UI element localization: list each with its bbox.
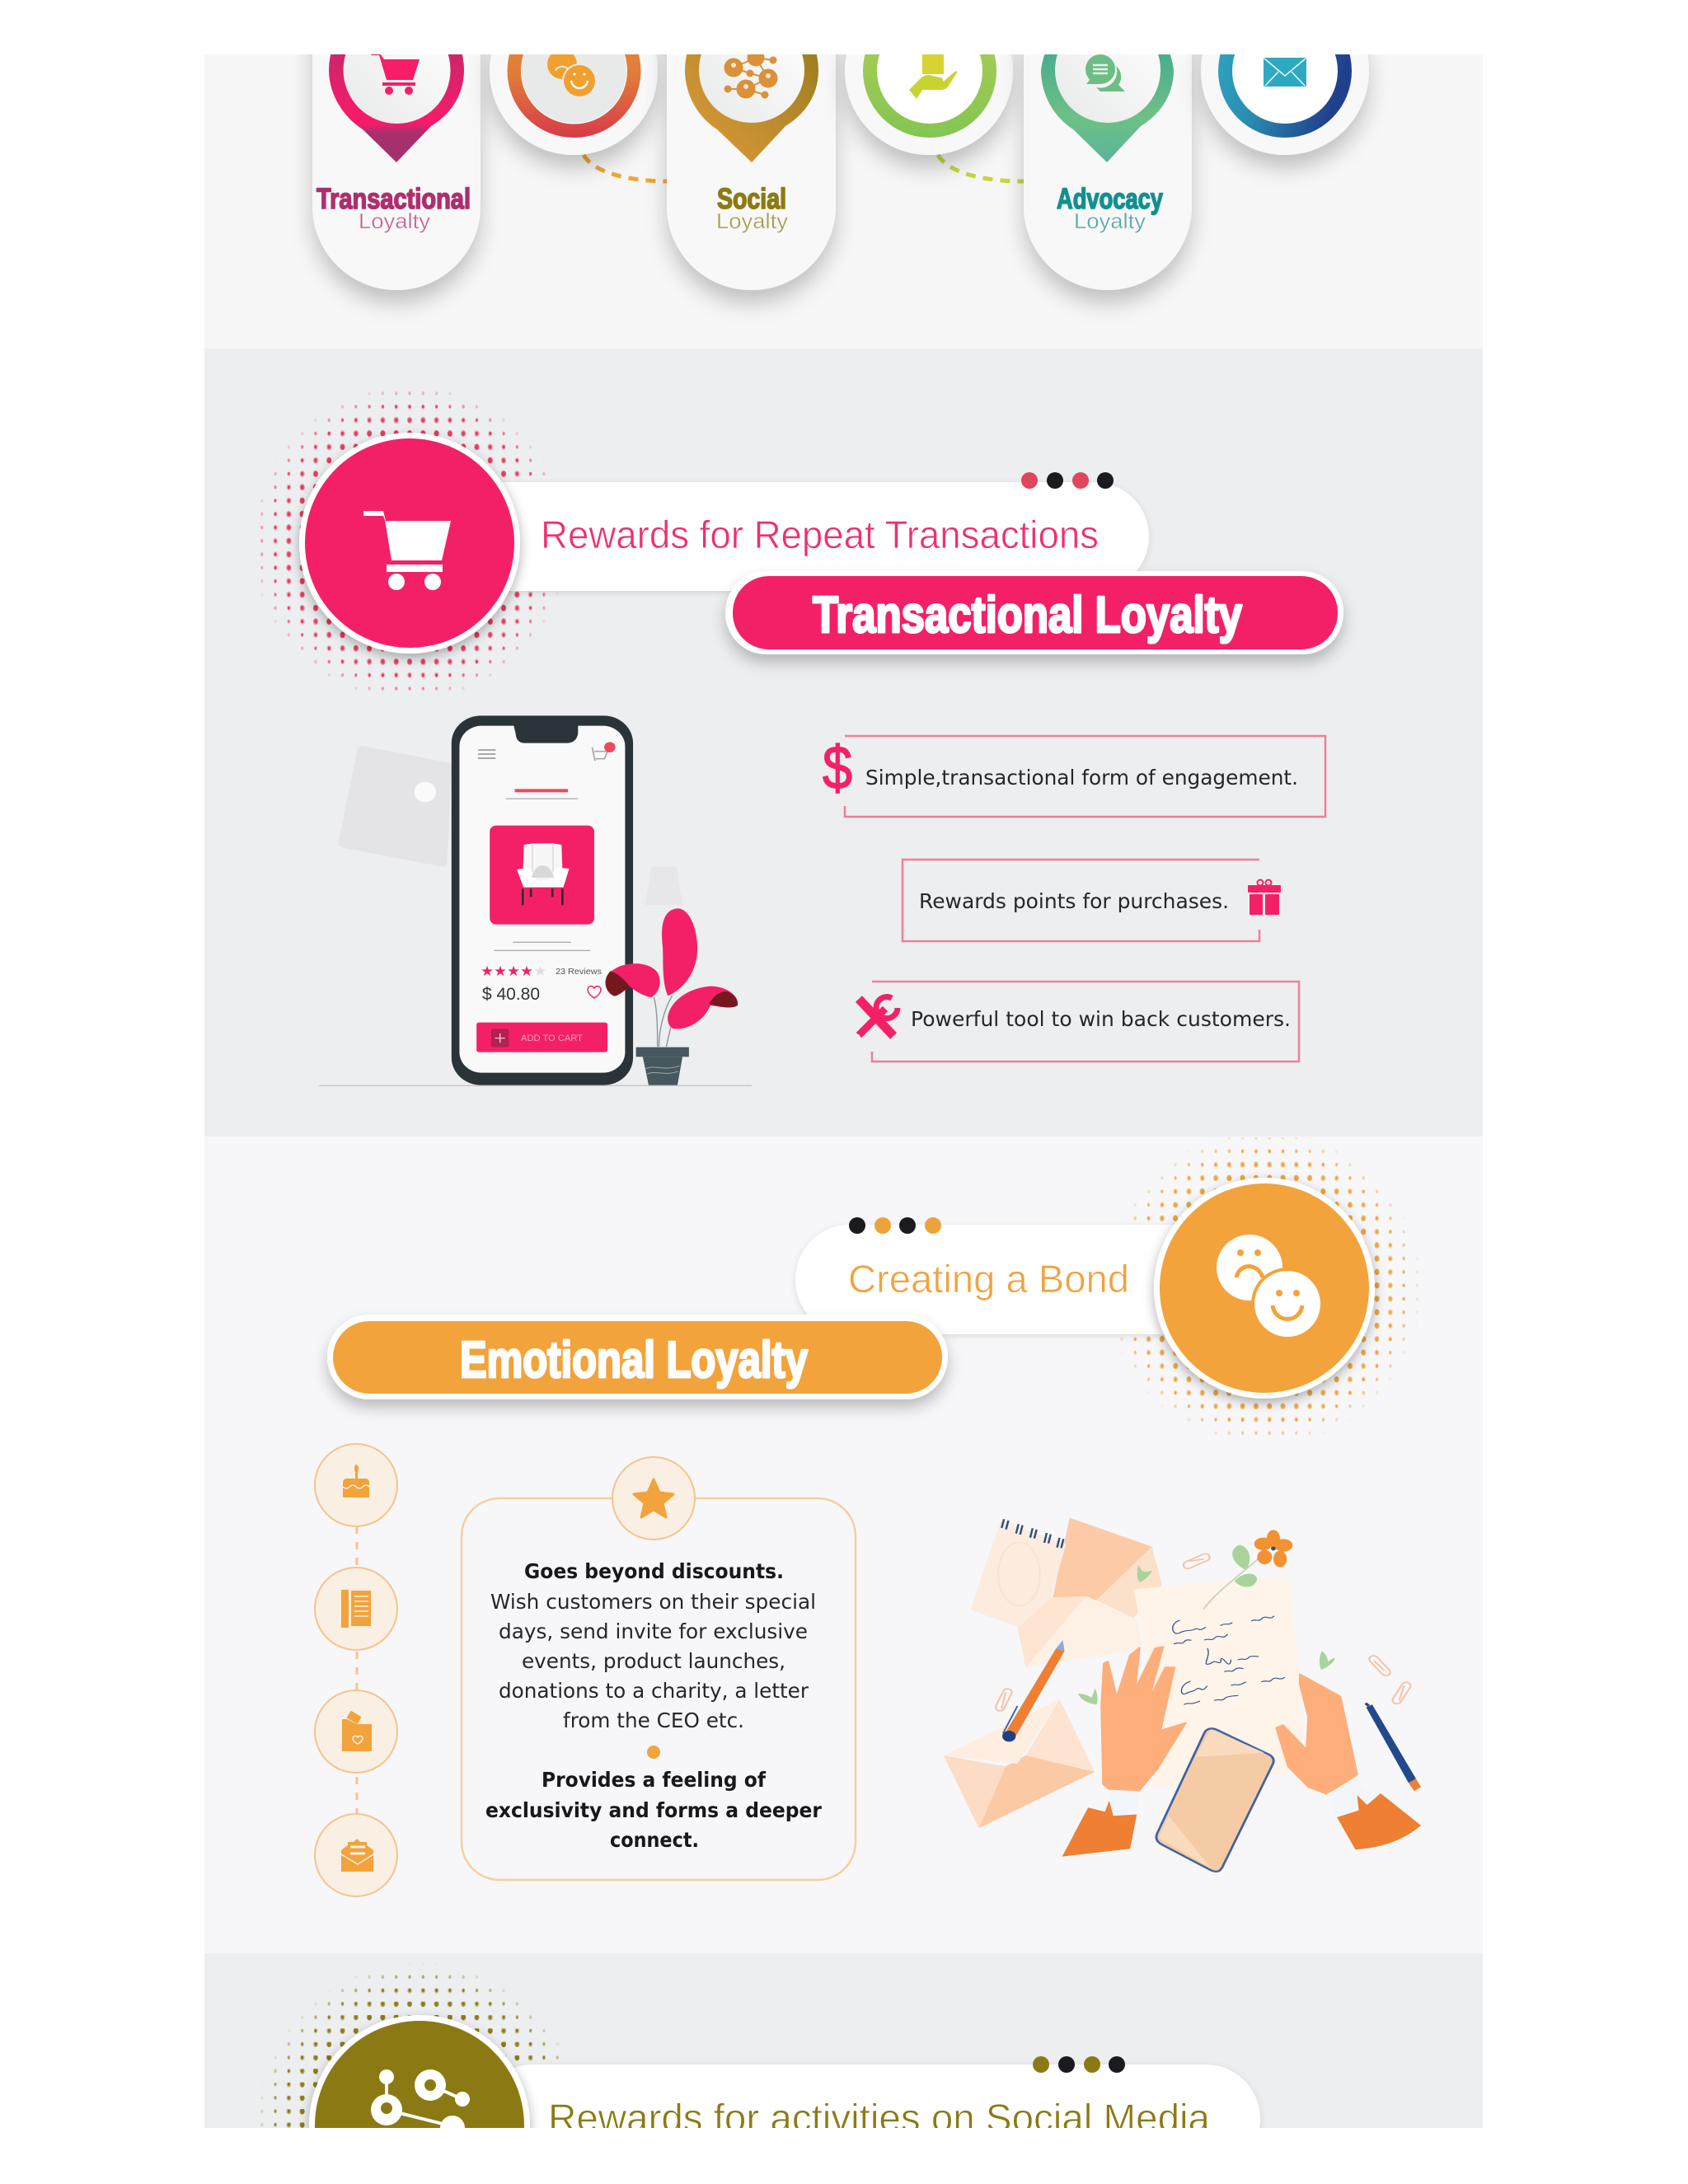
divider dot <box>647 1746 660 1759</box>
icon: hand holding box <box>909 54 957 99</box>
timeline icon: cake <box>315 1444 397 1526</box>
top section background <box>204 54 1483 349</box>
icon: chat bubbles <box>1085 54 1125 91</box>
title pill inner <box>333 1321 942 1394</box>
halftone dots small <box>1104 1137 1426 1451</box>
plus square <box>491 1029 509 1047</box>
notepad <box>970 1521 1067 1634</box>
icon: envelope <box>1264 58 1306 87</box>
subtitle pill <box>478 2064 1260 2173</box>
price: $ 40.80 <box>482 985 540 1004</box>
add to cart button <box>476 1023 607 1052</box>
label: loyalty: Loyalty <box>359 209 430 233</box>
lines <box>495 942 590 950</box>
left cuff <box>1110 1790 1138 1816</box>
label: social loyalty: Loyalty <box>716 209 788 233</box>
right cuff <box>1327 1779 1376 1817</box>
icon: smileys <box>1217 1235 1324 1340</box>
olive disc <box>315 2021 524 2184</box>
plus <box>495 1033 505 1043</box>
pin: transactional loyalty <box>312 0 481 290</box>
dashed connector: green <box>938 155 1024 181</box>
product title bar <box>515 789 568 792</box>
rating stars row: ★★★★ <box>481 963 533 979</box>
left hand <box>1101 1647 1185 1791</box>
left sleeve <box>1062 1801 1137 1857</box>
emotional header <box>327 1137 1426 1451</box>
subtitle text: Rewards for activities on Social Media <box>548 2096 1211 2139</box>
chair <box>517 843 570 905</box>
notepad rings <box>1001 1519 1063 1548</box>
icon circle <box>309 2015 530 2184</box>
right sleeve <box>1337 1793 1421 1849</box>
body line 3: events, product launches, <box>522 1649 785 1673</box>
paper clips <box>994 1553 1412 1712</box>
letter illustration <box>944 1518 1421 1872</box>
label: advocacy: Advocacy <box>1057 183 1163 215</box>
phone body <box>452 715 633 1085</box>
bullet card 1 <box>823 733 1325 817</box>
orange pencil <box>1002 1640 1065 1741</box>
small cart <box>592 748 607 761</box>
flower <box>1254 1530 1292 1568</box>
cart badge <box>604 742 616 752</box>
text: Rewards points for purchases. <box>919 889 1229 913</box>
icon: network <box>371 2069 470 2140</box>
icon circle <box>1154 1178 1375 1399</box>
transactional header <box>247 381 1343 705</box>
text: Powerful tool to win back customers. <box>911 1007 1291 1031</box>
product square <box>490 826 594 925</box>
title pill outer <box>327 1315 948 1399</box>
pink disc <box>305 438 514 648</box>
icon: tools <box>856 997 898 1038</box>
icon: smileys <box>547 54 595 96</box>
halftone dots small <box>256 1958 585 2131</box>
orange disc <box>1160 1183 1369 1393</box>
background card <box>343 750 447 863</box>
emotional section background <box>204 1137 1483 1953</box>
title: emotional loyalty: Emotional Loyalty <box>460 1332 808 1389</box>
pot <box>636 1047 689 1085</box>
social header <box>256 1958 1260 2184</box>
subtitle pill <box>795 1225 1224 1334</box>
bullet card 2 <box>903 860 1281 941</box>
paper sheet <box>1133 1576 1305 1788</box>
notch <box>513 724 578 743</box>
decorative dots <box>849 1217 941 1234</box>
back envelope <box>1053 1518 1152 1601</box>
text box <box>462 1457 856 1880</box>
envelope lower shade <box>1017 1596 1086 1667</box>
body line 1: Wish customers on their special <box>490 1590 816 1614</box>
green leaves <box>1078 1651 1335 1704</box>
flower stem <box>1203 1556 1261 1610</box>
bullet card 3 <box>856 982 1299 1062</box>
flower leaves <box>1232 1544 1257 1587</box>
subtitle pill <box>502 482 1151 594</box>
closing line 1: Provides a feeling of <box>542 1768 767 1792</box>
ground line <box>319 1085 752 1086</box>
phone glare <box>1159 1729 1264 1868</box>
heading line: Goes beyond discounts. <box>524 1559 784 1583</box>
phone on desk <box>1156 1728 1273 1872</box>
infographic canvas <box>204 54 1483 2128</box>
timeline icon: donation box <box>315 1690 397 1773</box>
phone illustration <box>319 715 752 1086</box>
title pill outer <box>725 571 1343 654</box>
title pill inner <box>733 576 1338 649</box>
social section background <box>204 1953 1483 2128</box>
bottom envelope <box>944 1699 1095 1828</box>
icon: gift <box>1248 880 1281 915</box>
label: advocacy loyalty: Loyalty <box>1074 209 1146 233</box>
subtitle text: Rewards for Repeat Transactions <box>541 513 1099 556</box>
envelope lower light <box>1026 1596 1143 1667</box>
icon: dollar: $ <box>823 733 852 802</box>
heart <box>588 987 601 998</box>
decorative dots <box>1021 472 1114 489</box>
background bag <box>645 867 682 905</box>
body line 2: days, send invite for exclusive <box>499 1619 808 1643</box>
pin: social loyalty <box>667 0 836 290</box>
plant stems <box>654 996 673 1047</box>
icon: network <box>724 49 777 98</box>
halftone dots large <box>273 405 533 679</box>
timeline icon: open letter <box>315 1814 397 1896</box>
reviews: 23 Reviews <box>556 968 602 977</box>
background dot <box>414 782 436 802</box>
body line 5: from the CEO etc. <box>563 1708 744 1732</box>
timeline connector <box>356 1526 358 1814</box>
pin: advocacy loyalty <box>1024 0 1192 290</box>
empty star: ★ <box>534 963 546 979</box>
closing line 3: connect. <box>610 1828 699 1852</box>
phone screen <box>459 726 625 1073</box>
text: Simple,transactional form of engagement. <box>865 766 1298 790</box>
timeline icon: booklet <box>315 1568 397 1650</box>
button label: ADD TO CART <box>521 1033 583 1043</box>
navy pencil <box>1366 1704 1421 1791</box>
halftone dots large <box>256 1958 585 2131</box>
handwriting <box>1173 1616 1285 1704</box>
right hand <box>1277 1675 1357 1794</box>
subtitle text: Creating a Bond <box>848 1257 1129 1301</box>
envelope right flap <box>1096 1547 1162 1618</box>
body line 4: donations to a charity, a letter <box>499 1679 809 1703</box>
green leaf <box>1137 1564 1152 1582</box>
title: transactional loyalty: Transactional Loyalty <box>813 587 1242 644</box>
dashed connector: orange <box>584 155 669 181</box>
transactional section background <box>204 349 1483 1137</box>
underline <box>506 798 578 799</box>
decorative dots <box>1033 2056 1125 2073</box>
notepad scribble <box>998 1543 1040 1605</box>
label: social: Social <box>717 183 786 215</box>
pin: emotional <box>480 54 667 178</box>
pin: email <box>1190 54 1380 178</box>
star badge <box>612 1457 695 1540</box>
halftone dots small <box>260 391 559 691</box>
pin: behavioural <box>834 54 1022 178</box>
icon: big cart <box>363 511 451 590</box>
halftone dots large <box>1104 1137 1426 1451</box>
label: transactional: Transactional <box>316 183 471 215</box>
closing line 2: exclusivity and forms a deeper <box>485 1798 823 1822</box>
icon: cart <box>371 54 420 95</box>
icon circle <box>299 433 520 654</box>
menu lines <box>478 750 495 758</box>
plant leaves <box>605 908 738 1029</box>
